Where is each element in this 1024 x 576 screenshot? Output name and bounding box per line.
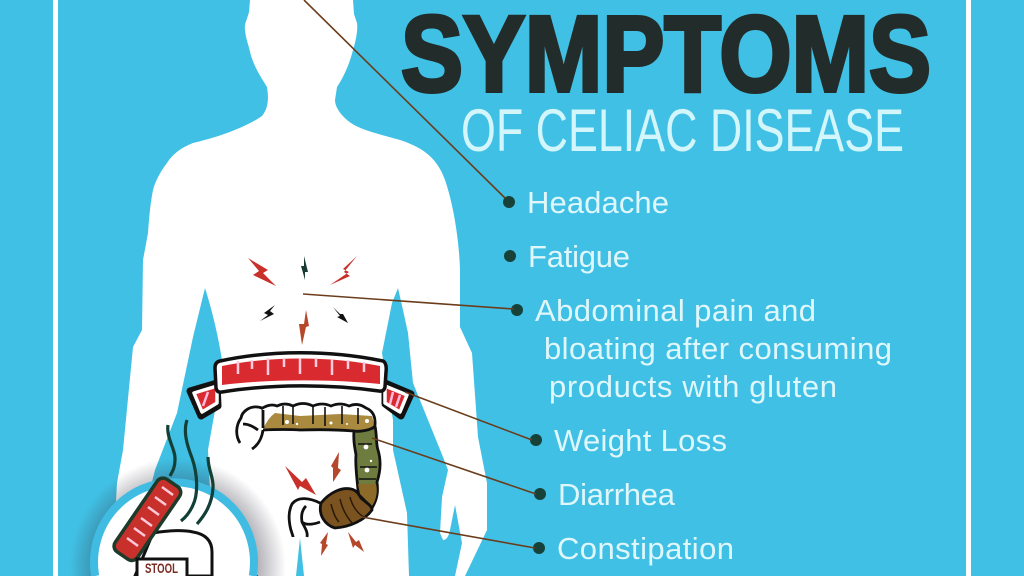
colon segment lines xyxy=(283,406,358,426)
symptom: abdominal pain: bloating after consuming xyxy=(544,331,892,366)
symptom: abdominal pain xyxy=(511,293,892,404)
left border line xyxy=(53,0,58,576)
circle shadow xyxy=(66,456,286,576)
rectum end xyxy=(289,499,320,537)
symptom: fatigue: Fatigue xyxy=(528,239,630,274)
left arm gap xyxy=(150,288,222,490)
descending brown section xyxy=(358,484,377,506)
symptom: diarrhea: Diarrhea xyxy=(558,477,676,512)
belt main band xyxy=(215,353,386,392)
bolt lower right xyxy=(348,532,364,552)
stool icon circle xyxy=(66,420,286,576)
belt left tail xyxy=(190,383,218,416)
symptom: abdominal pain: products with gluten xyxy=(549,369,837,404)
circle xyxy=(94,482,254,576)
jar label text: STOOL xyxy=(145,561,178,576)
symptom: weight loss: Weight Loss xyxy=(554,423,727,458)
right border line xyxy=(966,0,971,576)
symptom list xyxy=(503,185,892,566)
bolt top centre xyxy=(301,256,308,280)
colon top outline xyxy=(261,404,375,425)
stool jar xyxy=(135,531,212,576)
bolt lower left xyxy=(320,532,328,556)
colon segments xyxy=(358,444,377,479)
belt right tail xyxy=(385,383,411,416)
bolt mid centre xyxy=(299,310,309,345)
colon left end xyxy=(237,407,263,449)
belt ticks xyxy=(238,358,364,375)
bolt mid right xyxy=(333,307,348,323)
colon xyxy=(237,404,380,556)
bolt xyxy=(285,466,316,495)
pain bolts xyxy=(248,256,357,345)
symptom: constipation: Constipation xyxy=(557,531,734,566)
symptom: headache: Headache xyxy=(527,185,669,220)
jar label xyxy=(137,559,187,576)
sigmoid lump xyxy=(320,489,372,528)
lid ridges xyxy=(127,487,173,546)
bolt mid left xyxy=(260,305,275,321)
measuring tape belt xyxy=(190,353,411,416)
bolt top right xyxy=(330,256,357,285)
jar lid xyxy=(111,475,183,563)
colon spots xyxy=(285,419,372,472)
symptom: abdominal pain: Abdominal pain and xyxy=(535,293,816,328)
leg gap xyxy=(296,538,304,576)
descending colon xyxy=(354,426,380,508)
bolt top left xyxy=(248,258,276,286)
steam xyxy=(168,420,213,524)
colon bottom outline xyxy=(263,430,354,431)
leader lines xyxy=(213,0,536,576)
body silhouette xyxy=(112,0,487,576)
colon tan section xyxy=(263,413,375,431)
lump lines xyxy=(331,497,364,523)
bolt xyxy=(331,452,341,482)
circle ring xyxy=(94,482,254,576)
right arm gap xyxy=(382,288,462,576)
